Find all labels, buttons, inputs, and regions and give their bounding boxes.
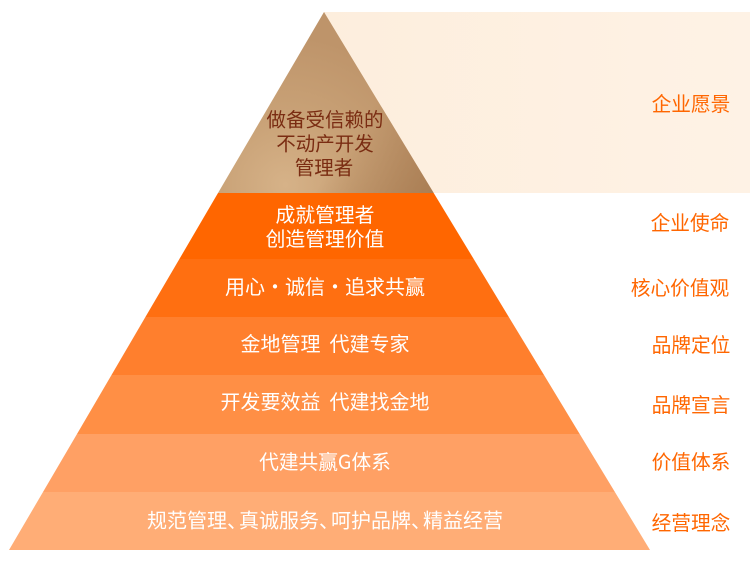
tier: value system <box>43 434 615 492</box>
right labels <box>631 88 730 536</box>
label: brand positioning: 品牌定位 <box>652 329 730 358</box>
pyramid apex: trustworthy manager: 不动产开发 <box>276 128 374 156</box>
pyramid apex: trustworthy manager <box>218 12 434 193</box>
label: philosophy: 经营理念 <box>652 507 730 536</box>
label: vision: 企业愿景 <box>652 88 730 117</box>
tier: brand statement: 开发要效益 代建找金地 <box>221 386 429 415</box>
tier: value system: 代建共赢G体系 <box>259 446 391 475</box>
tier: brand positioning <box>112 317 544 375</box>
tier: core values: 用心·诚信·追求共赢 <box>225 271 425 300</box>
tier: management philosophy <box>9 492 650 550</box>
tier: management philosophy: 规范管理、真诚服务、呵护品牌、精益经营 <box>147 504 503 534</box>
tier: core values <box>145 259 509 317</box>
tier: mission: 成就管理者 <box>276 199 374 228</box>
label: core values: 核心价值观 <box>631 272 730 301</box>
tier: brand statement <box>77 375 580 434</box>
tier: mission <box>179 193 474 259</box>
label: brand statement: 品牌宣言 <box>652 389 730 418</box>
pyramid apex: trustworthy manager: 管理者 <box>295 152 353 180</box>
tier: mission: 创造管理价值 <box>266 223 384 252</box>
tier: brand positioning: 金地管理 代建专家 <box>241 328 409 357</box>
pyramid apex: trustworthy manager: 做备受信赖的 <box>266 104 384 132</box>
label: value system: 价值体系 <box>652 446 730 475</box>
label: mission: 企业使命 <box>651 207 730 236</box>
vision background panel <box>324 12 750 193</box>
